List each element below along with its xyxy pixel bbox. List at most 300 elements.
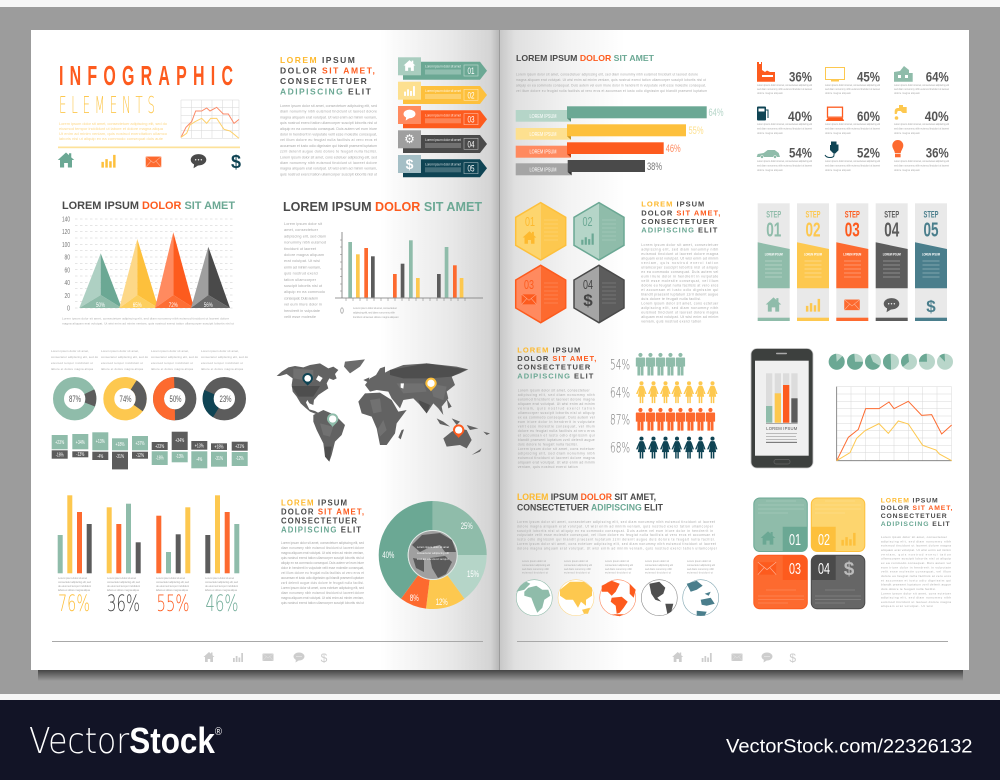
text block: tiles: aliquam erat volutpat. Ut wisi enim ad minim xyxy=(881,548,951,552)
text block: people xyxy=(518,388,596,469)
globe teal xyxy=(516,580,552,616)
up/down small bars: +23% xyxy=(55,440,65,446)
four text columns: eiusmod tempor incididunt ut xyxy=(101,361,143,365)
bar group 55% xyxy=(156,507,190,617)
ribbon 03: Lorem ipsum dolor sit amet xyxy=(425,113,461,117)
text block: top centre: zzril delenit augue duis dolore te feugait nulla facilisi. xyxy=(280,150,377,154)
text block: people: velit esse molestie consequat, vel illum xyxy=(518,424,595,428)
bar 64% xyxy=(516,106,724,122)
ribbon 01: 01 xyxy=(468,66,474,76)
left page footer xyxy=(52,641,483,665)
hexagon 04 xyxy=(574,265,624,323)
text block: pie chart xyxy=(281,541,364,605)
globes xyxy=(516,580,719,616)
text block: people: blandit praesent luptatum zzril delenit augue xyxy=(518,438,595,442)
tile 04: 04 xyxy=(818,561,830,578)
text block: top centre: Lorem ipsum dolor sit amet, consectetuer adipiscing elit, sed xyxy=(280,104,377,108)
bar chart side text: quis nostrud exerci xyxy=(284,272,318,276)
text block: tiles: ex ea commodo consequat. Duis autem vel xyxy=(881,561,951,565)
up/down small bars: +13% xyxy=(195,444,204,450)
triangle 56%: 56% xyxy=(204,302,213,309)
text block: top centre: Lorem ipsum dolor sit amet, cons ectetuer adipiscing elit, sed xyxy=(280,155,377,159)
title block: top centre: DOLOR SIT AMET, xyxy=(280,66,376,76)
text block: people: ullamcorper suscipit lobortis nisl ut aliquip xyxy=(518,411,595,415)
bar 55% xyxy=(516,124,704,140)
stat captions: sed diam nonummy nibh euismod tincidunt ut laoreet xyxy=(757,128,812,130)
title block: hexagons: LOREM IPSUM xyxy=(641,200,704,209)
title block: pie chart: CONSECTETUER xyxy=(281,517,357,526)
triangle chart caption xyxy=(62,316,234,326)
text block: people: ex ea commodo consequat. Duis autem vel xyxy=(518,416,595,420)
bar chart side text: vel eum iriure dolor in xyxy=(284,303,322,307)
text block: people: veniam, quis nostrud exerci tation xyxy=(518,465,578,469)
centre globe: consectetur adipiscing elit xyxy=(417,552,449,555)
title block: pie chart xyxy=(281,499,364,535)
stat captions: Lorem ipsum dolor sit amet, consectetuer adipiscing elit xyxy=(757,160,812,163)
stat: plug 52%: 52% xyxy=(857,145,880,161)
bar 38%: 38% xyxy=(647,161,662,173)
four text columns: labore et dolore magna aliqua xyxy=(151,367,193,371)
globe captions: consectetur adipiscing elit xyxy=(522,564,550,567)
text block: hexagons: adipiscing elit, sed diam nonummy nibh xyxy=(641,306,718,310)
bar 46%: 46% xyxy=(666,143,681,155)
text block: globes: vulputate velit esse molestie consequat, vel illum dolore eu feugiat nulla facilisis at vero eros et accumsan et xyxy=(517,533,715,537)
ribbon 04 xyxy=(398,130,487,153)
title block: tiles: DOLOR SIT AMET, xyxy=(881,505,953,512)
tile 02: 02 xyxy=(818,532,830,549)
text block: horizontal bars: magna aliquam erat volutpat. Ut wisi enim ad minim veniam, quis nostrud exerci tation ullamcorper suscipit lobortis nisl ut xyxy=(516,78,706,82)
text block: hexagons: ex ea commodo consequat. Duis autem vel xyxy=(641,270,719,274)
hexagon 02: 02 xyxy=(582,214,592,229)
triangle 65%: 65% xyxy=(133,302,142,309)
stat: car 54%: 54% xyxy=(789,145,812,161)
ribbon 04: 04 xyxy=(468,139,474,149)
bar group 76%: labore et dolore magna aliqua xyxy=(58,588,90,592)
text block: horizontal bars: Lorem ipsum dolor sit amet, consectetuer adipiscing elit, sed diam nonummy nibh euismod tincidunt ut laoreet dolore xyxy=(516,72,698,76)
world map xyxy=(277,359,490,462)
ribbon 03 xyxy=(398,106,487,128)
title block: pie chart: ADIPISCING ELIT xyxy=(281,526,361,535)
cover title: ELEMENTS xyxy=(59,93,155,119)
globe captions: euismod tincidunt ut xyxy=(522,572,548,574)
four text columns xyxy=(51,349,248,371)
stat captions: dolore magna aliquam xyxy=(825,92,851,95)
donut 87%: 87% xyxy=(69,394,81,404)
bar group 36%: consectetur adipiscing elit, sed xyxy=(107,580,140,584)
globe captions: sed diam nonummy nibh xyxy=(645,568,673,571)
text block: tiles: Lorem ipsum dolor sit amet, consectetuer xyxy=(881,535,947,539)
text block: tiles: et accumsan et iusto odio dignissim qui xyxy=(881,578,951,582)
text block: pie chart: quis nostrud exerci tation ullamcorper suscipit lobortis nisl ut xyxy=(281,556,364,560)
stat: car 54% xyxy=(757,145,812,161)
donut 50% xyxy=(158,382,191,415)
up/down small bars: +13% xyxy=(96,439,105,445)
stat captions: dolore magna aliquam xyxy=(757,132,783,135)
stat captions: dolore magna aliquam xyxy=(825,132,851,135)
phone bar chart xyxy=(766,373,798,424)
bar group 36%: do eiusmod tempor incididunt xyxy=(107,584,140,588)
text block: people: euismod tincidunt ut laoreet dolore magna xyxy=(518,456,595,460)
pie chart with globe xyxy=(382,516,479,607)
text block: top centre: dolor in hendrerit in vulputate velit esse molestie consequat, xyxy=(280,132,377,136)
four text columns: eiusmod tempor incididunt ut xyxy=(201,361,243,365)
title block: people: DOLOR SIT AMET, xyxy=(517,354,596,363)
globe captions: Lorem ipsum dolor sit xyxy=(687,560,711,563)
up/down small bars: -16% xyxy=(56,452,64,458)
title block: top centre: CONSECTETUER xyxy=(280,76,368,86)
bar group 36%: Lorem ipsum dolor sit amet xyxy=(107,576,136,580)
hexagon 04: $ xyxy=(583,291,593,310)
heading: triangle chart: LOREM IPSUM DOLOR SIT AMET xyxy=(62,200,235,212)
step 03 xyxy=(836,203,868,321)
text block: tiles: velit esse molestie consequat, vel illum xyxy=(881,570,951,574)
bar group 46% xyxy=(205,495,239,617)
up/down small bars: +34% xyxy=(76,440,85,446)
watermark strip xyxy=(0,694,1000,780)
step 05: 05 xyxy=(924,220,938,242)
people row 68%: 68% xyxy=(610,440,630,456)
bar 46% xyxy=(516,142,681,158)
globe captions: consectetur adipiscing elit xyxy=(605,564,633,567)
up/down small bars xyxy=(52,432,248,469)
bar chart side text: consequat. Duis autem xyxy=(284,296,318,300)
text block: hexagons: dolore eu feugiat nulla facilisis at vero eros xyxy=(641,284,719,288)
right page footer: $ xyxy=(789,651,796,665)
step columns xyxy=(758,203,947,321)
globe orange xyxy=(600,580,636,616)
text block: tiles: Lorem ipsum dolor sit amet, cons ectetuer xyxy=(881,591,951,595)
centre globe: sed do eiusmod tempor xyxy=(417,558,449,561)
pie chart with globe: 25% xyxy=(461,521,473,531)
ribbon 03: 03 xyxy=(468,115,474,125)
stat: laptop 60% xyxy=(826,107,880,124)
step 01 xyxy=(758,203,790,321)
hexagon 03: 03 xyxy=(524,277,534,292)
ribbon 05 xyxy=(398,155,487,177)
people pictograms xyxy=(610,353,718,458)
donut 74%: 74% xyxy=(120,394,132,404)
up/down small bars: -4% xyxy=(196,457,203,463)
globe captions: consectetur adipiscing elit xyxy=(645,564,673,567)
cover title: eiusmod tempor incididunt ut labore et dolore magna aliqua xyxy=(59,126,164,131)
stat captions: Lorem ipsum dolor sit amet, consectetuer adipiscing elit xyxy=(825,123,880,126)
title block: tiles: ADIPISCING ELIT xyxy=(881,521,951,528)
text block: hexagons: aliquam erat volutpat. Ut wisi enim ad minim xyxy=(641,256,718,260)
up/down small bars: -4% xyxy=(97,454,104,460)
text block: tiles: euismod tincidunt ut laoreet dolore magna xyxy=(881,544,951,548)
text block: horizontal bars xyxy=(516,72,707,93)
text block: top centre xyxy=(280,104,377,176)
y axis labels and gridlines: 140 xyxy=(62,216,70,224)
bar group 46%: labore et dolore magna aliqua xyxy=(205,588,237,592)
hexagon 01: 01 xyxy=(525,214,535,229)
text block: tiles: adipiscing elit, sed diam nonummy nibh xyxy=(881,539,951,543)
cover title: Lorem ipsum dolor sit amet, consectetuer adipiscing elit, sed do xyxy=(59,121,168,126)
bar 64%: LOREM IPSUM xyxy=(530,114,557,120)
right page footer xyxy=(517,641,948,665)
VectorStock logo: ® xyxy=(215,726,222,738)
pie chart with globe: 15% xyxy=(467,569,479,579)
y axis labels and gridlines: 60 xyxy=(64,268,70,274)
step 04: LOREM IPSUM xyxy=(883,252,901,256)
triangle chart caption: Lorem ipsum dolor sit amet, consectetuer adipiscing elit, sed diam nonummy nibh euismod tincidunt ut laoreet dolore xyxy=(62,316,229,320)
step 05 xyxy=(915,203,947,321)
bar chart side text: suscipit lobortis nisl ut xyxy=(284,284,323,288)
up/down small bars: +31% xyxy=(235,444,245,450)
text block: hexagons: euismod tincidunt ut laoreet dolore magna xyxy=(641,310,718,314)
triangle 72%: 72% xyxy=(169,302,178,309)
ribbon 02 xyxy=(398,82,487,104)
text block: pie chart: diam nonummy nibh euismod tincidunt ut laoreet dolore xyxy=(281,591,364,595)
right page xyxy=(500,30,969,670)
stat captions: sed diam nonummy nibh euismod tincidunt ut laoreet xyxy=(757,164,812,168)
four text columns: Lorem ipsum dolor sit amet, xyxy=(101,349,139,353)
step 01: LOREM IPSUM xyxy=(765,252,783,256)
stat captions: sed diam nonummy nibh euismod tincidunt ut laoreet xyxy=(894,164,949,168)
text block: tiles: duis dolore te feugait nulla facilisi. xyxy=(881,587,936,591)
step 04: 04 xyxy=(884,220,900,242)
stat: factory 36%: 36% xyxy=(789,69,812,85)
globe captions: euismod tincidunt ut xyxy=(687,572,713,574)
tile 01: 01 xyxy=(789,532,801,549)
triangle 65% xyxy=(119,239,158,309)
text block: top centre: magna aliquam erat volutpat. Ut wisi enim ad minim veniam, xyxy=(280,115,377,119)
bar chart side text: hendrerit in vulputate xyxy=(284,309,320,313)
step 02: STEP xyxy=(806,209,820,219)
four text columns: Lorem ipsum dolor sit amet, xyxy=(201,349,239,353)
up/down small bars: -12% xyxy=(136,453,144,459)
tile 03: 03 xyxy=(789,561,801,578)
bar group 46%: 46% xyxy=(206,592,238,617)
text block: people: Lorem ipsum dolor sit amet, consectetuer xyxy=(518,388,591,392)
cover icon row: $ xyxy=(231,152,241,172)
bar 55%: 55% xyxy=(688,125,704,137)
text block: tiles: euismod tincidunt ut laoreet dolore magna xyxy=(881,600,951,604)
text block: top centre: diam nonummy nibh euismod tincidunt ut laoreet dolore xyxy=(280,110,377,114)
step 03: 03 xyxy=(845,220,860,242)
bar chart side text: tincidunt ut laoreet xyxy=(284,247,317,251)
bar group 36% xyxy=(107,504,141,617)
text block: hexagons xyxy=(641,243,719,324)
donut 50%: 50% xyxy=(170,394,182,404)
icon statistics grid xyxy=(757,62,949,172)
map pins xyxy=(302,373,464,438)
triangle chart xyxy=(62,216,235,313)
heading: globes: CONSECTETUER ADIPISCING ELIT xyxy=(517,503,664,513)
text block: people: aliquam erat volutpat. Ut wisi enim ad minim xyxy=(518,460,595,464)
four text columns: labore et dolore magna aliqua xyxy=(101,367,143,371)
four text columns: consectetur adipiscing elit, sed do xyxy=(151,355,198,359)
bar chart side text: aliquip ex ea commodo xyxy=(284,290,325,294)
title block: people: LOREM IPSUM xyxy=(517,345,580,354)
stat captions: sed diam nonummy nibh euismod tincidunt ut laoreet xyxy=(825,88,880,91)
small line chart xyxy=(181,100,239,138)
up/down small bars: -12% xyxy=(236,456,244,462)
bar chart side text: tation ullamcorper xyxy=(284,278,317,282)
text block: pie chart: vel illum dolore eu feugiat nulla facilisis at vero eros et xyxy=(281,571,364,575)
text block: tiles: blandit praesent luptatum zzril delenit augue xyxy=(881,583,951,587)
up/down small bars: +23% xyxy=(155,444,165,450)
globe captions: euismod tincidunt ut xyxy=(645,572,671,574)
smartphone: LOREM IPSUM xyxy=(766,426,798,431)
y axis labels and gridlines: 80 xyxy=(64,255,70,262)
four text columns: consectetur adipiscing elit, sed do xyxy=(201,355,248,359)
bar 38%: LOREM IPSUM xyxy=(530,168,557,174)
text block: globes: dolore magna aliquam erat volutpat. Ut wisi enim ad minim veniam, quis nostrud exerci tation ullamcorper xyxy=(517,524,714,528)
bar chart xyxy=(335,232,483,319)
pie chart with globe: 40% xyxy=(382,550,394,560)
step 04 xyxy=(876,203,908,321)
text block: people: Lorem ipsum dolor sit amet, cons ectetuer xyxy=(518,447,596,451)
bar 55%: LOREM IPSUM xyxy=(530,132,557,138)
stat: house 64% xyxy=(894,66,949,85)
title block: pie chart: LOREM IPSUM xyxy=(281,499,347,508)
step 04: STEP xyxy=(884,209,899,219)
title block: tiles: LOREM IPSUM xyxy=(881,497,938,504)
globe blue xyxy=(683,580,719,616)
mini pie row xyxy=(829,354,953,370)
text block: people: eum iriure dolor in hendrerit in vulputate xyxy=(518,420,595,424)
bar group 46%: consectetur adipiscing elit, sed xyxy=(205,580,238,584)
title block: top centre xyxy=(280,55,376,96)
four text columns: Lorem ipsum dolor sit amet, xyxy=(51,349,89,353)
text block: pie chart: aliquip ex ea commodo consequat. Duis autem vel eum iriure xyxy=(281,561,364,565)
globe captions: Lorem ipsum dolor sit xyxy=(522,560,546,563)
bar group 76%: do eiusmod tempor incididunt xyxy=(58,584,91,588)
text block: hexagons: blandit praesent luptatum zzril delenit augue xyxy=(641,292,718,296)
globe dark xyxy=(641,580,677,616)
step 02: LOREM IPSUM xyxy=(804,252,822,256)
step 05: LOREM IPSUM xyxy=(922,252,940,256)
text block: top centre: magna aliquam erat volutpat. Ut wisi enim ad minim veniam, xyxy=(280,167,377,171)
stat captions xyxy=(757,84,949,172)
text block: hexagons: Lorem ipsum dolor sit amet, cons ectetuer xyxy=(641,302,719,306)
text block: globes: Lorem ipsum dolor sit amet, consectetuer adipiscing elit, sed diam nonummy nibh euismod tincidunt ut laoreet xyxy=(517,520,715,524)
bar group 76%: Lorem ipsum dolor sit amet xyxy=(58,576,87,580)
pie chart with globe: 8% xyxy=(410,593,419,603)
people row 64%: 64% xyxy=(610,385,630,401)
y axis labels and gridlines: 20 xyxy=(64,293,70,300)
ribbon 04: ⚙ xyxy=(404,132,415,146)
up/down small bars: -31% xyxy=(215,456,223,462)
left page footer: $ xyxy=(321,651,328,665)
step 05: $ xyxy=(926,297,936,316)
text block: globes: dolore magna aliquam erat volutpat. Ut wisi enim ad minim veniam, quis nostrud exerci tation ullamcorper xyxy=(517,546,718,550)
y axis labels and gridlines: 40 xyxy=(64,280,70,287)
heading: bar chart: LOREM IPSUM DOLOR SIT AMET xyxy=(283,200,482,214)
globe captions: sed diam nonummy nibh xyxy=(522,568,550,571)
image id: VectorStock.com/22326132 xyxy=(726,737,972,758)
text block: pie chart: magna aliquam erat volutpat. Ut wisi enim ad minim veniam, xyxy=(281,551,364,555)
ribbon 05: $ xyxy=(406,156,414,172)
text block: globes: Lorem ipsum dolor sit amet, cons ectetuer adipiscing elit, sed diam nonummy nibh euismod tincidunt ut laoreet xyxy=(517,542,716,546)
bar group 55%: consectetur adipiscing elit, sed xyxy=(156,580,189,584)
bar chart: Lorem ipsum dolor sit amet, consectetuer xyxy=(353,306,397,310)
bar chart side text: erat volutpat. Ut wisi xyxy=(284,259,320,263)
ribbon 02: 02 xyxy=(468,90,474,100)
step 02 xyxy=(797,203,829,321)
bar 64%: 64% xyxy=(708,107,724,119)
bar group 36%: 36% xyxy=(107,592,140,617)
text block: tiles: adipiscing elit, sed diam nonummy nibh xyxy=(881,596,951,600)
text block: hexagons: veniam, quis nostrud exerci tation xyxy=(641,261,718,265)
text block: people: veniam, quis nostrud exerci tation xyxy=(518,406,595,410)
up/down small bars: +37% xyxy=(136,441,145,447)
title block: tiles: CONSECTETUER xyxy=(881,513,947,520)
step 02: 02 xyxy=(806,220,820,242)
y axis labels and gridlines: 120 xyxy=(62,229,70,236)
up/down small bars: +34% xyxy=(175,438,185,444)
text block: people: dolore eu feugiat nulla facilisis at vero eros xyxy=(518,429,595,433)
up/down small bars: +18% xyxy=(116,442,125,448)
stat: monitor 45% xyxy=(826,68,880,85)
stat: house 64%: 64% xyxy=(926,69,949,85)
stat: monitor 45%: 45% xyxy=(857,69,880,85)
stat: factory 36% xyxy=(757,62,812,85)
stat captions: dolore magna aliquam xyxy=(894,169,920,172)
text block: pie chart: zzril delenit augue duis dolore te feugait nulla facilisi. xyxy=(281,581,364,585)
title block: hexagons: CONSECTETUER xyxy=(641,217,715,226)
text block: people: duis dolore te feugait nulla facilisi. xyxy=(518,442,578,446)
text block: pie chart: Lorem ipsum dolor sit amet, cons ectetuer adipiscing elit, sed xyxy=(281,586,364,590)
bar group 76% xyxy=(58,495,92,617)
people row 54%: 54% xyxy=(610,357,630,373)
text block: hexagons: adipiscing elit, sed diam nonummy nibh xyxy=(641,248,718,252)
globe captions: sed diam nonummy nibh xyxy=(564,568,592,571)
stat: bulb 36%: 36% xyxy=(926,145,949,161)
triangle 72% xyxy=(155,232,194,309)
bar chart: tincidunt ut laoreet dolore magna aliquam xyxy=(353,315,400,319)
text block: hexagons: duis dolore te feugait nulla facilisi. xyxy=(641,297,701,301)
centre globe: Lorem ipsum dolor sit amet xyxy=(417,546,449,549)
four text columns: consectetur adipiscing elit, sed do xyxy=(101,355,148,359)
text block: hexagons: euismod tincidunt ut laoreet dolore magna xyxy=(641,252,718,256)
hexagons xyxy=(516,203,624,323)
y axis labels and gridlines: 0 xyxy=(67,306,70,313)
text block: horizontal bars: vel illum dolore eu feugiat nulla facilisis at vero eros et accumsan et iusto odio dignissim qui blandit praesent luptatum xyxy=(516,89,707,93)
four text columns: labore et dolore magna aliqua xyxy=(51,367,93,371)
tile 04 xyxy=(811,555,865,609)
stat captions: dolore magna aliquam xyxy=(757,169,783,172)
triangle 50% xyxy=(79,253,122,309)
text block: hexagons: veniam, quis nostrud exerci tation xyxy=(641,320,701,324)
triangle 56% xyxy=(191,247,230,309)
text block: hexagons: Lorem ipsum dolor sit amet, consectetuer xyxy=(641,243,719,247)
ribbon 01 xyxy=(398,57,487,80)
stat: bulb 36% xyxy=(892,140,949,161)
bar chart side text: Lorem ipsum dolor sit xyxy=(284,222,323,226)
step 05: STEP xyxy=(924,209,938,219)
people row 87%: 87% xyxy=(610,412,630,428)
bar group 36%: labore et dolore magna aliqua xyxy=(107,588,139,592)
globe captions xyxy=(522,560,715,574)
stat captions: Lorem ipsum dolor sit amet, consectetuer adipiscing elit xyxy=(894,160,949,163)
bar chart side text: dolore magna aliquam xyxy=(284,253,324,257)
step 01: 01 xyxy=(766,220,781,242)
ribbon 04: Lorem ipsum dolor sit amet xyxy=(425,138,461,142)
text block: tiles: eum iriure dolor in hendrerit in vulputate xyxy=(881,565,951,569)
stat captions: sed diam nonummy nibh euismod tincidunt ut laoreet xyxy=(825,128,880,130)
globe captions: consectetur adipiscing elit xyxy=(564,564,592,567)
text block: pie chart: quis nostrud exerci tation ullamcorper suscipit lobortis nisl ut xyxy=(281,601,364,605)
text block: top centre: quis nostrud exerci tation ullamcorper suscipit lobortis nisl ut xyxy=(280,121,377,125)
text block: people: aliquam erat volutpat. Ut wisi enim ad minim xyxy=(518,402,595,406)
title block: tiles xyxy=(881,497,953,528)
title block: hexagons xyxy=(641,200,720,235)
text block: pie chart: magna aliquam erat volutpat. Ut wisi enim ad minim veniam, xyxy=(281,596,364,600)
stat captions: dolore magna aliquam xyxy=(894,92,920,95)
up/down small bars: -31% xyxy=(116,454,124,460)
